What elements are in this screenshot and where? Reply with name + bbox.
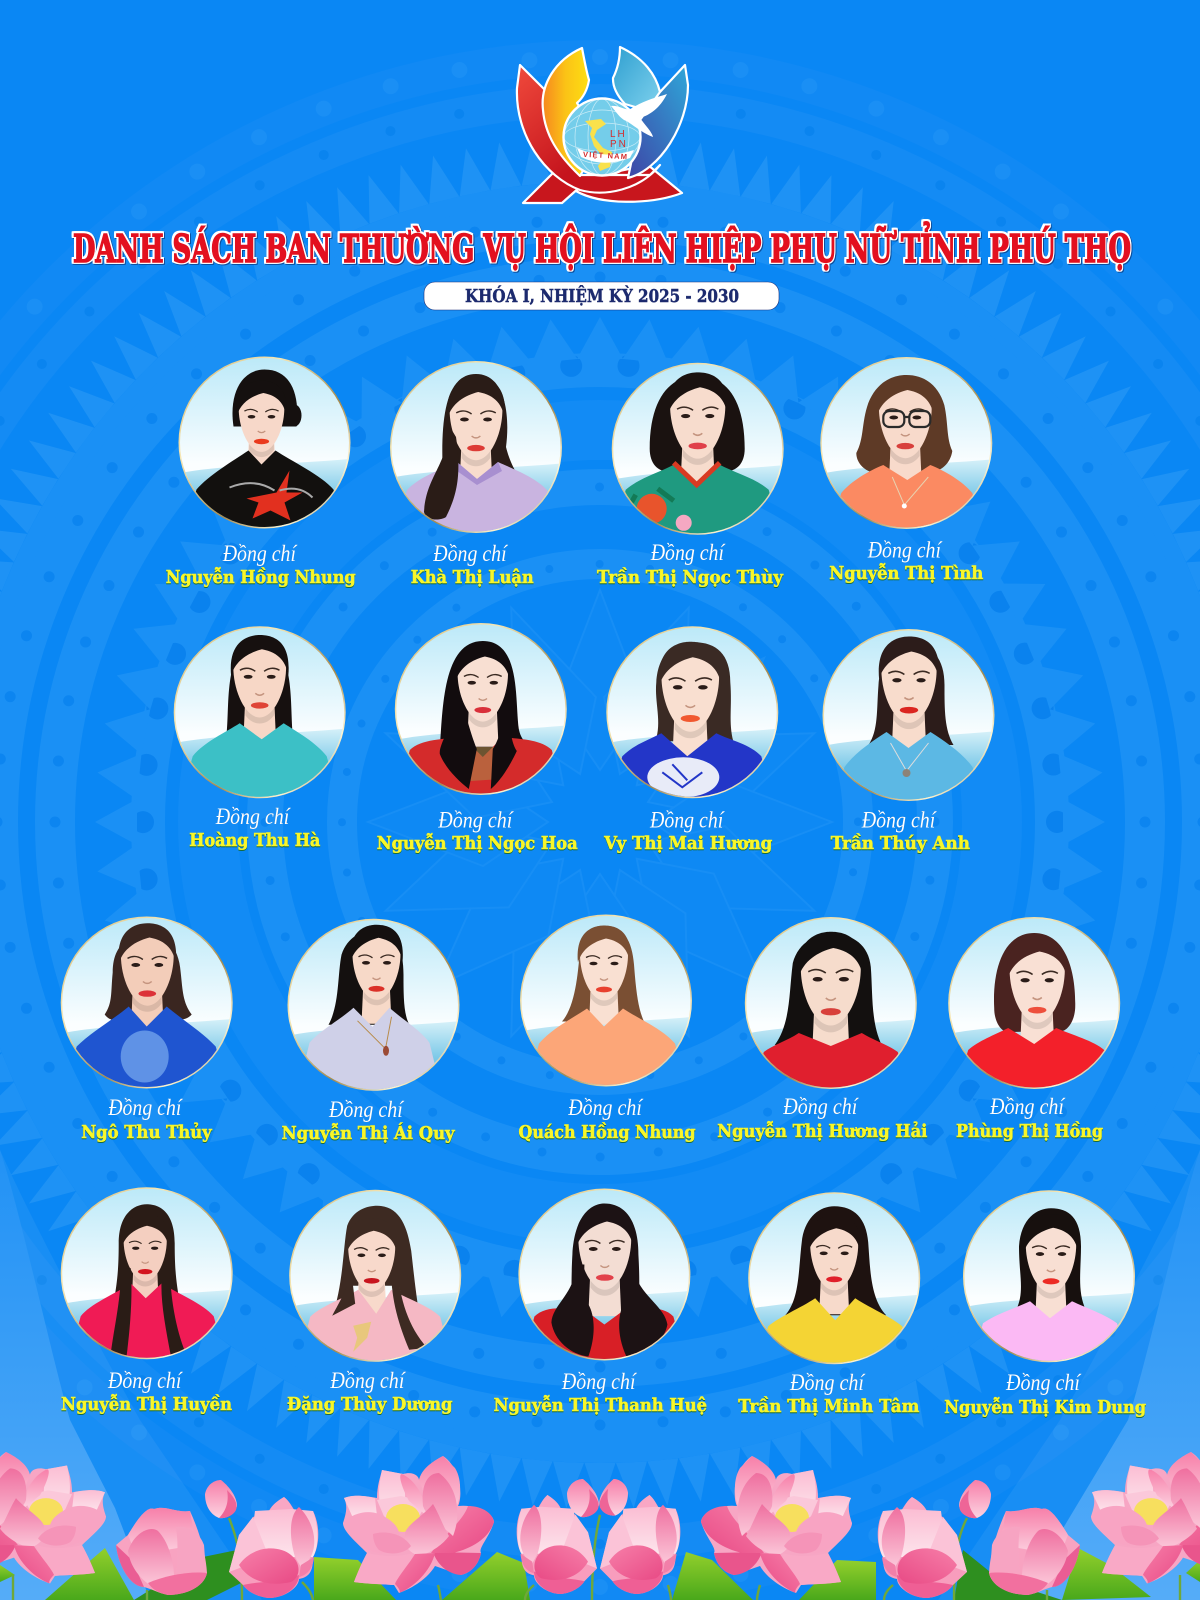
member card 2 — [386, 357, 566, 588]
portrait — [288, 918, 460, 1091]
label: Đồng chí — [789, 1370, 866, 1395]
name: Trần Thị Ngọc Thùy — [597, 566, 783, 588]
corner light shape left — [0, 1150, 262, 1600]
portrait — [289, 1190, 462, 1362]
portrait — [606, 626, 778, 798]
name: Trần Thị Minh Tâm — [738, 1395, 919, 1417]
label: Đồng chí — [782, 1094, 860, 1119]
member card 18 — [944, 1186, 1146, 1418]
label: Đồng chí — [649, 808, 726, 833]
label: Đồng chí — [107, 1368, 184, 1393]
logo — [517, 47, 688, 203]
label: Đồng chí — [328, 1097, 405, 1122]
name: Nguyễn Thị Hương Hải — [717, 1120, 927, 1142]
member card 17 — [738, 1188, 924, 1417]
portrait — [518, 1188, 690, 1360]
portrait — [744, 917, 917, 1089]
portrait — [178, 356, 350, 528]
portrait — [748, 1192, 920, 1364]
portrait — [963, 1190, 1135, 1362]
member card 10 — [282, 915, 464, 1144]
member card 16 — [494, 1184, 707, 1416]
lotus stems — [13, 1515, 1180, 1600]
name: Quách Hồng Nhung — [518, 1121, 696, 1143]
label: Đồng chí — [215, 804, 292, 829]
name: Nguyễn Hồng Nhung — [166, 566, 356, 588]
label: Đồng chí — [222, 541, 298, 566]
portrait — [390, 361, 562, 533]
label: Đồng chí — [567, 1095, 644, 1120]
member card 5 — [170, 622, 350, 851]
name: Nguyễn Thị Thanh Huệ — [494, 1394, 707, 1416]
member card 6 — [377, 619, 578, 854]
logo globe: LH — [610, 129, 627, 140]
portrait — [520, 914, 692, 1086]
label: Đồng chí — [330, 1368, 407, 1393]
label: Đồng chí — [107, 1095, 184, 1120]
portrait — [822, 629, 994, 801]
logo globe — [564, 98, 640, 176]
name: Khà Thị Luận — [411, 567, 534, 588]
label: Đồng chí — [861, 808, 938, 833]
member card 3 — [597, 359, 788, 588]
name: Hoàng Thu Hà — [189, 830, 321, 851]
label: Đồng chí — [867, 538, 943, 563]
term badge — [424, 282, 779, 310]
name: Nguyễn Thị Huyền — [61, 1393, 232, 1415]
portrait — [820, 357, 992, 529]
name: Trần Thúy Anh — [831, 832, 970, 854]
name: Nguyễn Thị Tình — [829, 562, 983, 584]
logo ribbon — [577, 148, 634, 163]
member card 1 — [166, 352, 356, 588]
name: Nguyễn Thị Kim Dung — [944, 1396, 1146, 1418]
name: Đặng Thùy Dương — [287, 1394, 453, 1415]
member card 11 — [516, 910, 696, 1143]
label: Đồng chí — [437, 808, 515, 833]
name: Nguyễn Thị Ái Quy — [282, 1121, 455, 1144]
member card 14 — [57, 1183, 237, 1415]
term badge: KHÓA I, NHIỆM KỲ 2025 - 2030 — [465, 284, 739, 307]
logo globe: PN — [610, 139, 628, 150]
name: Phùng Thị Hồng — [956, 1120, 1103, 1142]
logo ribbon: VIỆT NAM — [583, 150, 627, 161]
lotus flowers — [0, 1452, 106, 1584]
portrait — [394, 623, 567, 795]
name: Ngô Thu Thủy — [81, 1121, 212, 1143]
label: Đồng chí — [432, 541, 509, 566]
lotus border — [0, 1452, 1200, 1600]
label: Đồng chí — [989, 1094, 1066, 1119]
portrait — [948, 917, 1120, 1089]
label: Đồng chí — [1005, 1370, 1082, 1395]
corner light shape right — [938, 1150, 1200, 1600]
portrait — [174, 626, 346, 798]
member card 9 — [57, 912, 237, 1143]
name: Vy Thị Mai Hương — [603, 833, 773, 854]
portrait — [60, 1187, 233, 1360]
portrait — [60, 916, 233, 1088]
member card 7 — [602, 622, 782, 854]
lotus leaves — [0, 1548, 1200, 1600]
member card 4 — [816, 353, 996, 584]
label: Đồng chí — [561, 1369, 638, 1394]
name: Nguyễn Thị Ngọc Hoa — [377, 832, 578, 854]
member card 12 — [717, 913, 927, 1142]
label: Đồng chí — [650, 540, 726, 565]
member card 15 — [285, 1186, 465, 1415]
portrait — [612, 362, 784, 535]
member card 8 — [818, 625, 998, 854]
logo dove — [611, 94, 667, 137]
member card 13 — [944, 913, 1124, 1142]
